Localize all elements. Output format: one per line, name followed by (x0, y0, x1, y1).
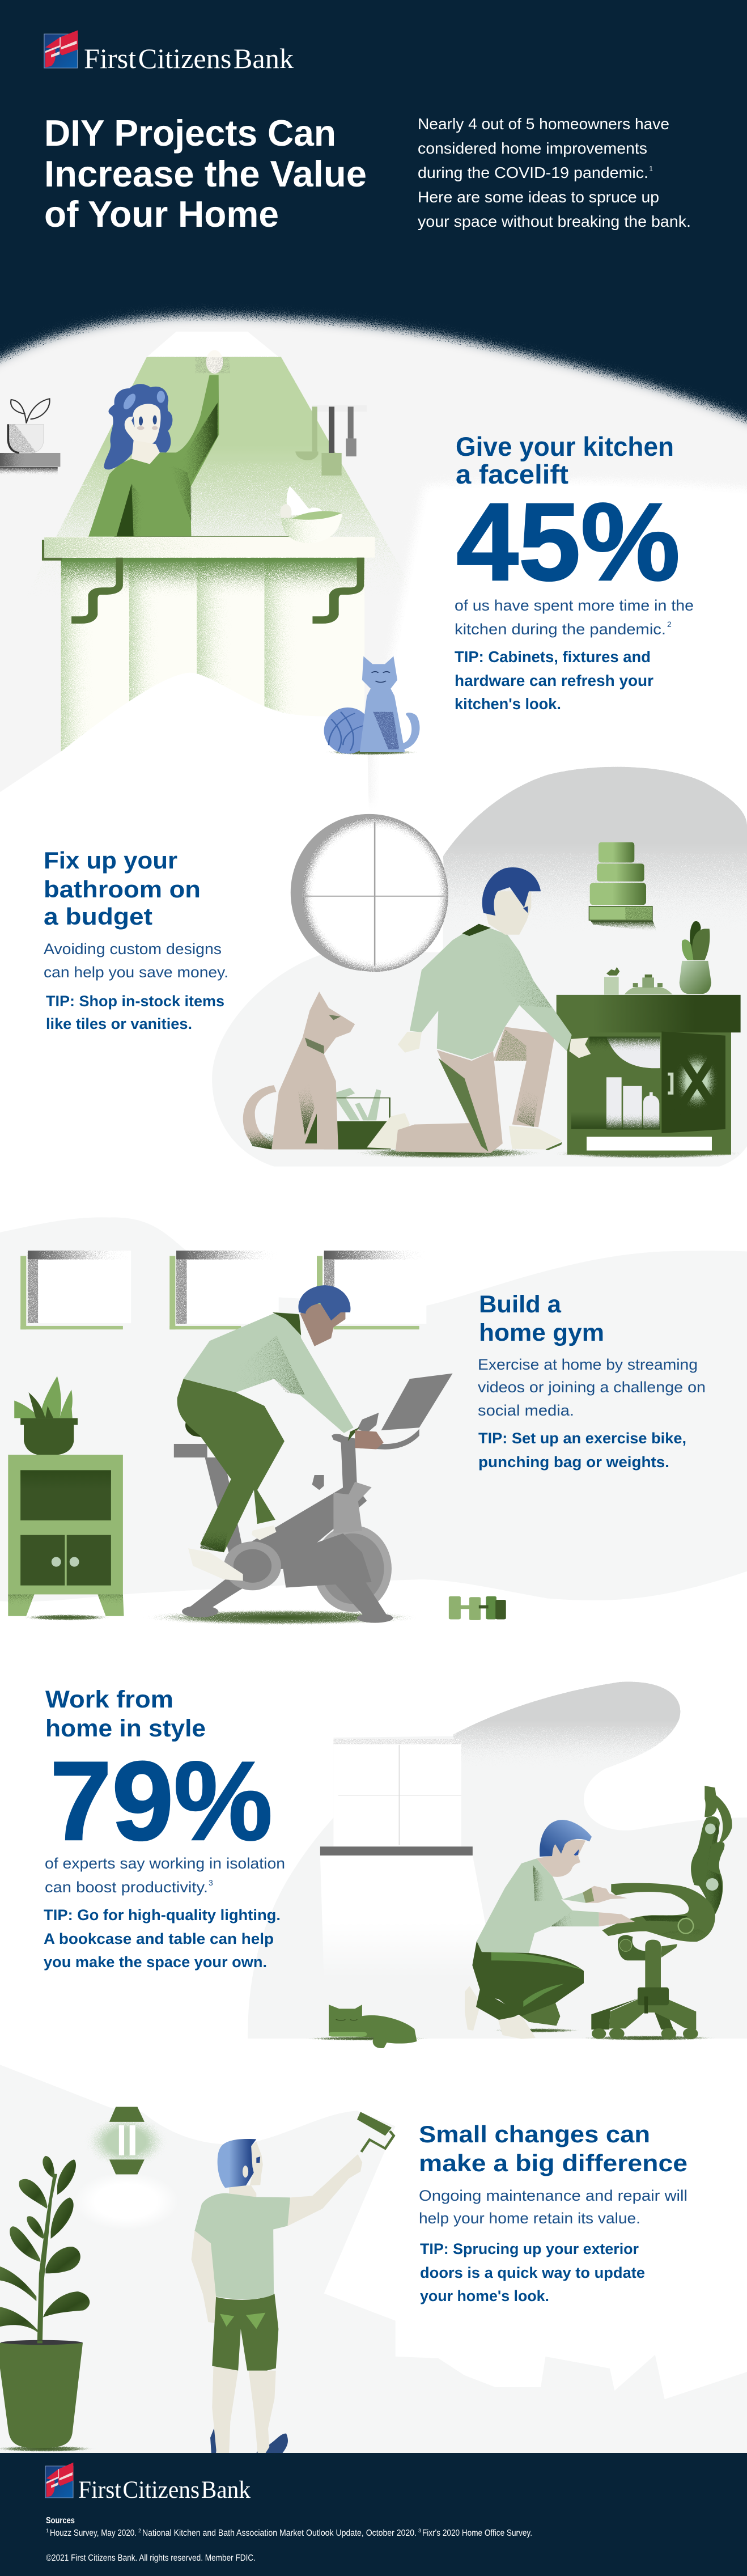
tip: kitchen's look. (455, 695, 561, 713)
heading: Small changes can (419, 2121, 650, 2147)
round mirror (291, 814, 448, 972)
footer logo: First Citizens Bank (78, 2477, 251, 2503)
wordmark: First Citizens Bank (84, 43, 294, 74)
tip (455, 648, 653, 713)
tip: doors is a quick way to update (420, 2264, 645, 2281)
panel: office background (248, 1682, 747, 2039)
panel: painting background (0, 2065, 747, 2455)
cabinets (42, 536, 375, 766)
panel: kitchen illustration (0, 332, 420, 832)
heading (456, 431, 674, 489)
heading: home gym (479, 1319, 604, 1346)
window (320, 1739, 495, 1977)
heading: Fix up your (44, 847, 177, 874)
body: videos or joining a challenge on (478, 1379, 706, 1396)
body (419, 2187, 687, 2227)
tip: punching bag or weights. (478, 1454, 669, 1471)
intro text: your space without breaking the bank. (418, 213, 691, 230)
icon: flag (44, 30, 78, 68)
utensils on rail (295, 405, 367, 476)
panel: bathroom illustration (243, 814, 744, 1159)
intro text (418, 115, 691, 230)
heading: a facelift (456, 459, 568, 489)
panel: office illustration (303, 1739, 732, 2048)
cat with yarn (324, 656, 420, 755)
windows (20, 1251, 426, 1329)
sources: National Kitchen and Bath Association Market Outlook Update, October 2020. (142, 2528, 417, 2538)
sources (46, 2516, 532, 2538)
green hood light (24, 357, 419, 600)
intro text: Here are some ideas to spruce up (418, 188, 659, 206)
stat: 79%: 79% (50, 1738, 273, 1863)
body (478, 1356, 706, 1419)
exercise bike (143, 1374, 453, 1625)
body: social media. (478, 1402, 574, 1419)
potted plant (0, 2156, 96, 2452)
heading: home in style (45, 1715, 206, 1742)
copyright: ©2021 First Citizens Bank. All rights reserved. Member FDIC. (46, 2553, 256, 2563)
tip (478, 1430, 686, 1471)
text: kitchen (455, 431, 694, 713)
panel: bathroom background (212, 767, 747, 1167)
range hood top (147, 332, 278, 357)
sources: 2 (138, 2528, 141, 2533)
wall lamp (83, 2107, 169, 2175)
tip: TIP: Cabinets, fixtures and (455, 648, 651, 666)
dumbbell (449, 1596, 506, 1620)
body: help your home retain its value. (419, 2210, 640, 2227)
panel: gym illustration (8, 1251, 506, 1625)
tip: TIP: Shop in-stock items (46, 993, 224, 1010)
panel: gym background (0, 1217, 747, 1601)
heading: bathroom on (44, 876, 201, 903)
body: Avoiding custom designs (44, 940, 222, 957)
heading (419, 2121, 687, 2176)
footer logo (45, 2463, 251, 2503)
man kneeling (353, 867, 591, 1159)
title: DIY Projects Can (44, 112, 336, 154)
intro text: 1 (649, 164, 653, 173)
title: Increase the Value (44, 153, 367, 194)
heading: a budget (44, 903, 152, 930)
sources: 1 (46, 2528, 49, 2533)
panel: painting illustration (0, 2107, 394, 2453)
heading: Build a (479, 1291, 562, 1318)
tip: TIP: Set up an exercise bike, (478, 1430, 686, 1447)
text: painting (419, 2121, 687, 2304)
office chair (591, 1786, 732, 2039)
man cycling (177, 1285, 384, 1581)
man painting (192, 2112, 394, 2453)
heading: make a big difference (419, 2150, 687, 2176)
text: bathroom (44, 847, 228, 1032)
intro text: considered home improvements (418, 139, 647, 157)
title (44, 112, 367, 235)
header background (0, 0, 747, 454)
toolbox (324, 1088, 391, 1150)
text: gym (478, 1291, 706, 1471)
title: of Your Home (44, 193, 279, 235)
tip: like tiles or vanities. (46, 1015, 192, 1032)
body: of experts say working in isolation (45, 1855, 285, 1872)
tip: you make the space your own. (44, 1954, 267, 1971)
sources: Houzz Survey, May 2020. (50, 2528, 137, 2538)
tip (46, 993, 224, 1032)
paint roller (357, 2112, 394, 2152)
heading (479, 1291, 604, 1346)
plant and cabinet (8, 1376, 124, 1621)
body: Ongoing maintenance and repair will (419, 2187, 687, 2204)
man assembling chair (465, 1820, 635, 2039)
tip: hardware can refresh your (455, 672, 653, 689)
text: office (44, 1686, 285, 1971)
body (44, 940, 228, 981)
body: Exercise at home by streaming (478, 1356, 698, 1373)
woman (88, 350, 230, 537)
body: can boost productivity. (45, 1879, 208, 1896)
body (45, 1855, 285, 1896)
body: kitchen during the pandemic. (455, 621, 666, 638)
body: can help you save money. (44, 964, 228, 981)
body: 2 (667, 620, 672, 629)
heading: Give your kitchen (456, 431, 674, 461)
heading (44, 847, 201, 930)
man and office chair (465, 1786, 732, 2041)
body: 3 (209, 1878, 213, 1887)
tip: your home's look. (420, 2287, 549, 2304)
footer (0, 2453, 747, 2576)
body: of us have spent more time in the (455, 597, 694, 614)
intro text: Nearly 4 out of 5 homeowners have (418, 115, 669, 133)
white hill (0, 673, 369, 832)
tip: TIP: Sprucing up your exterior (420, 2240, 639, 2257)
dog (243, 992, 391, 1150)
tip (420, 2240, 645, 2304)
cat sleeping (303, 2005, 431, 2048)
sources: 3 (418, 2528, 421, 2533)
cabinet brackets (71, 558, 364, 624)
towels and plant and vanity (551, 842, 744, 1159)
intro text: during the COVID-19 pandemic. (418, 164, 648, 181)
wall shelf and plant (0, 399, 60, 476)
stat: 45%: 45% (456, 480, 680, 604)
heading: Work from (45, 1686, 173, 1713)
kitchen section background (0, 313, 747, 822)
tip (44, 1906, 281, 1971)
sources: Fixr's 2020 Home Office Survey. (422, 2528, 532, 2538)
mortar bowl (280, 486, 342, 543)
heading (45, 1686, 206, 1742)
sources: Sources (46, 2516, 75, 2526)
tip: TIP: Go for high-quality lighting. (44, 1906, 281, 1923)
logo (44, 30, 294, 74)
body (455, 597, 694, 638)
tip: A bookcase and table can help (44, 1930, 274, 1947)
